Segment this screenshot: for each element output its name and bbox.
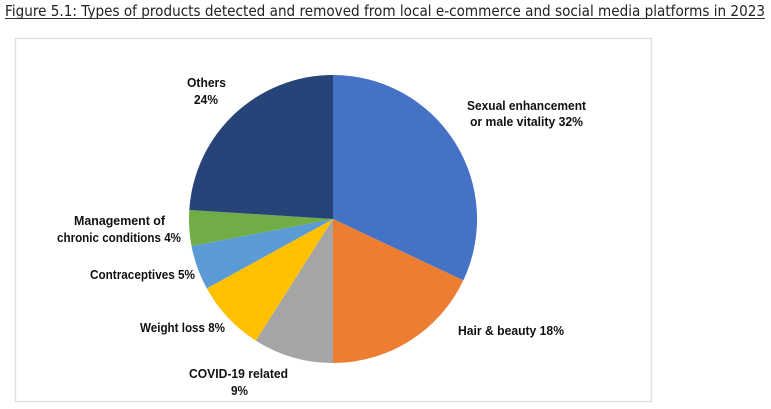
label: contraceptives: Contraceptives 5% [90, 268, 195, 282]
panel: chart frame [16, 38, 652, 402]
slice: COVID-19 related [256, 219, 333, 363]
pie chart [189, 75, 477, 363]
label: others [187, 76, 226, 107]
label: others: Others [187, 76, 226, 90]
slice: chronic conditions [189, 210, 333, 246]
label: COVID-19 related: 9% [231, 384, 248, 398]
label: chronic conditions [57, 214, 181, 245]
label: chronic conditions: chronic conditions 4% [57, 231, 181, 245]
label: sexual enhancement [467, 99, 587, 129]
slice: others [189, 75, 333, 219]
label: hair and beauty: Hair & beauty 18% [458, 324, 564, 338]
label: sexual enhancement: or male vitality 32% [470, 115, 583, 129]
label: COVID-19 related [189, 367, 288, 398]
label: weight loss: Weight loss 8% [140, 321, 225, 335]
slice: weight loss [207, 219, 333, 341]
slice: contraceptives [192, 219, 333, 288]
label: chronic conditions: Management of [74, 214, 166, 228]
slice: sexual enhancement [333, 75, 477, 280]
slice: hair and beauty [333, 219, 463, 363]
label: others: 24% [194, 93, 218, 107]
label: COVID-19 related: COVID-19 related [189, 367, 288, 381]
label: sexual enhancement: Sexual enhancement [467, 99, 587, 113]
